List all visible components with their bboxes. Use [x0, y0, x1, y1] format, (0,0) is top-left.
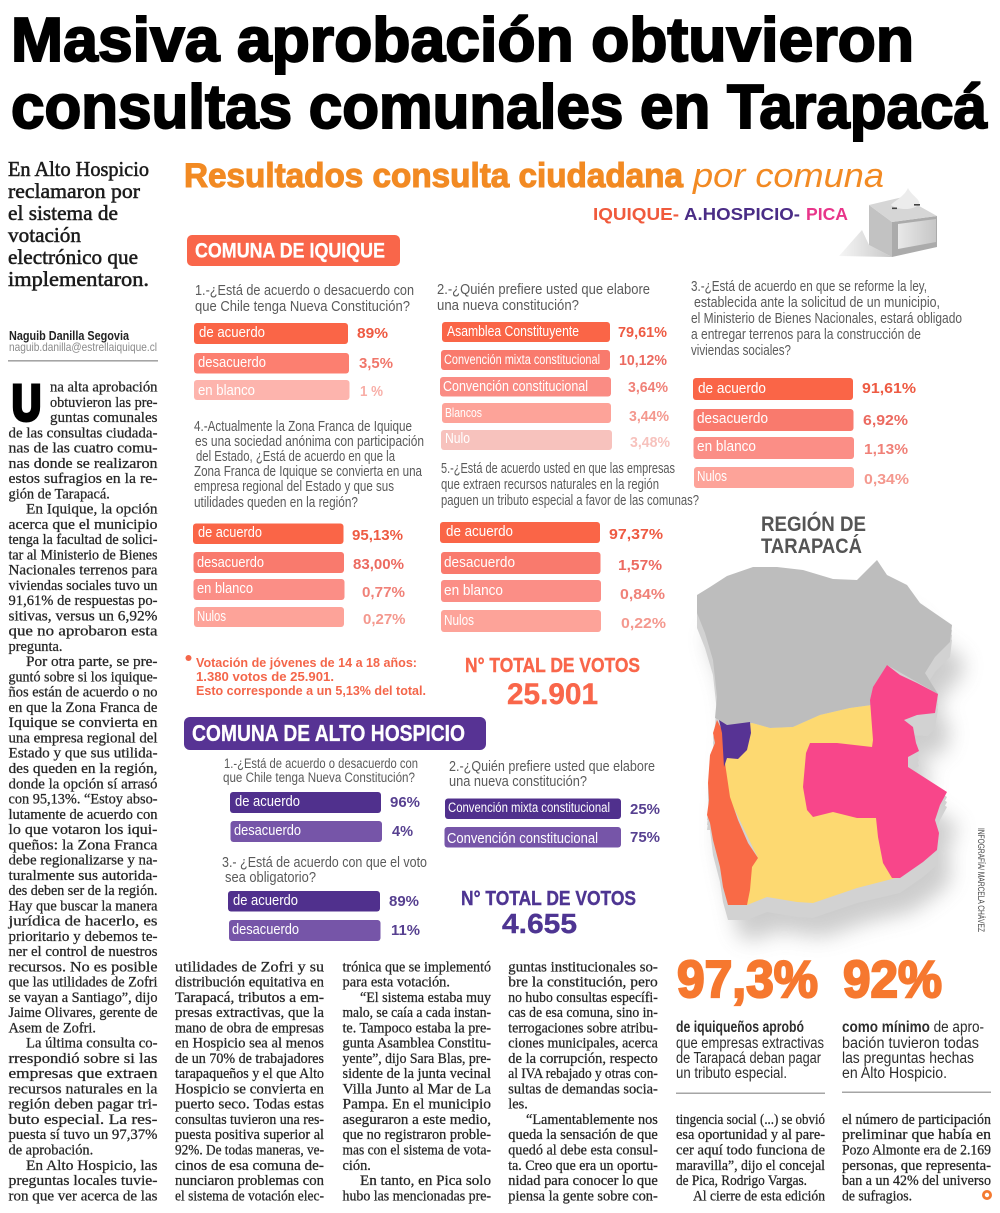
stat: 97,3%: un tributo especial. — [676, 1065, 787, 1082]
body column 3: hubo las mencionadas pre- — [342, 1188, 491, 1204]
chart: Iquique question 3: 0,34% — [864, 471, 909, 488]
body column 6: ban a un 42% del universo — [842, 1173, 991, 1189]
panel: comuna de Iquique heading: COMUNA DE IQUIQUE — [195, 240, 385, 262]
body column 6: personas, que representa- — [842, 1158, 991, 1174]
chart: Iquique question 2: Nulo — [445, 431, 470, 447]
body column 4: queda la sensación de que — [508, 1127, 658, 1143]
chart: Alto Hospicio question 3: desacuerdo — [232, 922, 299, 938]
body column 1: Jaime Olivares, gerente de — [8, 1005, 158, 1021]
chart: Iquique question 1: 3,5% — [359, 355, 393, 372]
body column 4: guntas institucionales so- — [508, 959, 658, 975]
body column 1: tenga la facultad de solici- — [8, 532, 158, 548]
body column 5: cer aquí todo funciona de — [676, 1142, 825, 1158]
total votes Alto Hospicio: 4.655 — [502, 908, 577, 939]
body column 5: de Pica, Rodrigo Vargas. — [676, 1173, 807, 1189]
chart: Iquique question 2: 3,44% — [629, 408, 669, 425]
section heading: por comuna — [692, 157, 884, 195]
total votes Iquique: 25.901 — [507, 678, 598, 711]
map title — [761, 512, 866, 558]
section heading: Resultados consulta ciudadana — [184, 157, 684, 195]
chart: Iquique question 2: 2.-¿Quién prefiere usted que elabore — [437, 282, 650, 298]
body column 1: des queden en la región, — [8, 761, 158, 777]
callout: youth vote — [186, 655, 426, 698]
chart: Alto Hospicio question 2 — [444, 759, 660, 848]
callout: youth vote: Esto corresponde a un 5,13% del total. — [196, 683, 426, 698]
deck text: electrónico que — [8, 245, 138, 269]
chart: Alto Hospicio question 1: que Chile tenga Nueva Constitución? — [223, 770, 415, 785]
chart: Alto Hospicio question 2: Convención constitucional — [447, 831, 598, 847]
body column 4: nidad para conocer lo que — [508, 1173, 658, 1189]
body column 1: jurídica de hacerlo, es — [7, 914, 158, 930]
deck text: reclamaron por — [8, 179, 140, 203]
chart: Alto Hospicio question 2: Convención mixta constitucional — [448, 800, 610, 815]
map: yellow commune — [725, 705, 896, 905]
chart: Alto Hospicio question 1: 1.-¿Está de acuerdo o desacuerdo con — [224, 756, 418, 771]
chart: Alto Hospicio question 3: sea obligatorio? — [225, 870, 316, 886]
chart: Iquique question 3: 3.-¿Está de acuerdo en que se reforme la ley, — [691, 279, 927, 295]
body column 1: puesta sí tuvo un 97,37% — [8, 1127, 158, 1143]
chart: Iquique question 2: 3,48% — [630, 434, 670, 451]
body column 6: Pozo Almonte era de 2.169 — [842, 1142, 991, 1158]
stat: 97,3%: que empresas extractivas — [676, 1035, 824, 1052]
chart: Iquique question 4: 95,13% — [352, 527, 403, 544]
body column 1: ner el control de nuestros — [8, 944, 158, 960]
body column 4: les. — [508, 1097, 528, 1113]
total votes Alto Hospicio: N° TOTAL DE VOTOS — [461, 888, 636, 910]
body column 1: donde la opción sí arrasó — [8, 776, 158, 792]
chart: Iquique question 2: una nueva constitución? — [437, 298, 579, 314]
commune subheading: PICA — [806, 204, 848, 224]
body column 1: región deben pagar tri- — [8, 1097, 158, 1113]
chart: Alto Hospicio question 1: de acuerdo — [235, 794, 300, 810]
chart: Iquique question 5: desacuerdo — [444, 555, 515, 571]
total votes Iquique — [465, 655, 640, 711]
deck text: el sistema de — [8, 201, 118, 225]
chart: Iquique question 1: de acuerdo — [199, 325, 265, 341]
body column 3: ción. — [342, 1158, 371, 1174]
title: Masiva aprobación obtuvieron — [11, 6, 914, 75]
body column 5: Al cierre de esta edición — [693, 1188, 825, 1204]
body column 4: ciones municipales, acerca — [508, 1036, 658, 1052]
chart: Iquique question 1: 1.-¿Está de acuerdo o desacuerdo con — [195, 283, 414, 299]
chart: Iquique question 3: viviendas sociales? — [691, 343, 791, 359]
chart: Iquique question 3: 91,61% — [862, 380, 916, 397]
body column 1: Nacionales terrenos para — [8, 563, 158, 579]
body column 1: queños: la Zona Franca — [8, 837, 158, 853]
deck text — [8, 157, 149, 291]
body column 2: distribución equitativa en — [175, 975, 324, 991]
body column 4: al IVA rebajado y otras con- — [508, 1066, 658, 1082]
body column 3: mas con el sistema de vota- — [342, 1142, 491, 1158]
body column 1: una empresa regional del — [8, 730, 158, 746]
body column 4 — [508, 959, 658, 1204]
chart: Iquique question 3: 1,13% — [864, 441, 908, 458]
body column 4: sultas de demandas socia- — [508, 1082, 658, 1098]
body column 2 — [175, 959, 325, 1204]
body column 1 — [7, 380, 158, 1204]
total votes Alto Hospicio — [461, 888, 636, 939]
stat: 97,3%: de Tarapacá deban pagar — [676, 1050, 821, 1067]
panel: comuna de Alto Hospicio heading: COMUNA DE ALTO HOSPICIO — [192, 720, 465, 746]
chart: Iquique question 2: 79,61% — [618, 324, 667, 341]
chart: Alto Hospicio question 2: 2.-¿Quién prefiere usted que elabore — [449, 759, 655, 775]
body column 2: Tarapacá, tributos a em- — [175, 990, 324, 1006]
body column 1: Asem de Zofri. — [8, 1020, 96, 1036]
body column 1: preguntas locales tuvie- — [8, 1173, 158, 1189]
chart: Alto Hospicio question 1 — [223, 756, 420, 842]
chart: Iquique question 3: Nulos — [697, 469, 727, 485]
body column 1: pregunta. — [8, 639, 62, 655]
chart: Iquique question 2: 3,64% — [628, 379, 668, 396]
body column 1: La última consulta co- — [26, 1036, 158, 1052]
chart: Iquique question 2: Convención mixta constitucional — [444, 352, 600, 367]
commune subheading: IQUIQUE- — [593, 204, 679, 224]
body column 4: piensa la gente sobre con- — [508, 1188, 658, 1204]
callout: youth vote: Votación de jóvenes de 14 a 18 años: — [196, 655, 417, 670]
title: consultas comunales en Tarapacá — [11, 73, 987, 142]
chart: Alto Hospicio question 1: 4% — [392, 823, 413, 840]
stat: 97,3%: de iquiqueños aprobó — [676, 1019, 804, 1036]
icon: ballot box — [839, 188, 937, 257]
chart: Iquique question 5: en blanco — [444, 583, 503, 599]
chart: Iquique question 1: 1 % — [360, 383, 383, 400]
chart: Iquique question 5: 97,37% — [609, 526, 663, 543]
chart: Iquique question 2: Asamblea Constituyente — [447, 324, 579, 340]
body column 2: mano de obra de empresas — [175, 1020, 324, 1036]
body column 1: buto especial. La res- — [8, 1112, 158, 1128]
credit: INFOGRAFÍA/ MARCELA CHÁVEZ — [975, 828, 986, 932]
body column 2: utilidades de Zofri y su — [175, 959, 324, 975]
panel: comuna de Iquique heading — [187, 235, 400, 266]
body column 3: yente”, dijo Sara Blas, pre- — [342, 1051, 491, 1067]
body column 1: rrespondió sobre si las — [8, 1051, 158, 1067]
stat: 92%: bación tuvieron todas — [842, 1035, 979, 1052]
body column 4: “Lamentablemente nos — [526, 1112, 658, 1128]
chart: Iquique question 5: 0,22% — [621, 615, 666, 632]
body column 3: que no registraron proble- — [342, 1127, 491, 1143]
body column 3: Villa Junto al Mar de La — [342, 1082, 492, 1098]
body column 1: nas de las cuatro comu- — [8, 440, 158, 456]
chart: Iquique question 4: 83,00% — [353, 556, 404, 573]
body column 1: sitivas, versus un 6,92% — [8, 608, 158, 624]
body column 1: ron que ver acerca de las — [8, 1188, 158, 1204]
map: Iquique commune — [707, 720, 758, 905]
body column 1: nas donde se realizaron — [8, 456, 158, 472]
chart: Iquique question 3: 6,92% — [863, 412, 908, 429]
chart: Iquique question 5: que extraen recursos naturales en la región — [441, 477, 659, 493]
body column 6: el número de participación — [842, 1112, 991, 1128]
body column 3: malo, se caía a cada instan- — [342, 1005, 491, 1021]
chart: Iquique question 1: 89% — [357, 325, 388, 342]
body column 2: en Hospicio sea al menos — [175, 1036, 324, 1052]
body column 1: En Alto Hospicio, las — [26, 1158, 158, 1174]
body column 4: quedó al debe esta consul- — [508, 1142, 658, 1158]
body column 2: puerto seco. Todas estas — [175, 1097, 324, 1113]
body column 4: bre la constitución, pero — [508, 975, 658, 991]
chart: Iquique question 3: a entregar terrenos para la construcción de — [691, 327, 921, 343]
deck text: implementaron. — [8, 267, 149, 291]
body column 2: presas extractivas, que la — [175, 1005, 325, 1021]
body column 1: debe regionalizarse y na- — [8, 853, 158, 869]
chart: Iquique question 4: 0,27% — [363, 611, 406, 628]
chart: Alto Hospicio question 3: 3.- ¿Está de acuerdo con que el voto — [222, 855, 427, 871]
body column 1: empresas que extraen — [8, 1066, 158, 1082]
chart: Iquique question 2: 10,12% — [619, 352, 667, 369]
commune subheading — [593, 204, 848, 224]
icon: end mark — [982, 1190, 992, 1200]
body column 1: Hay que buscar la manera — [8, 898, 158, 914]
chart: Alto Hospicio question 1: desacuerdo — [234, 823, 301, 839]
chart: Iquique question 3: establecida ante la solicitud de un municipio, — [694, 295, 940, 311]
chart: Alto Hospicio question 3: 11% — [391, 922, 420, 939]
body column 1: Estado y que sus utilida- — [8, 746, 158, 762]
body column 3: gunta Asamblea Constitu- — [342, 1036, 491, 1052]
body column 1: guntó sobre si los iquique- — [8, 669, 158, 685]
chart: Iquique question 5 — [440, 461, 699, 632]
stat: 92% — [842, 951, 991, 1093]
chart: Iquique question 4: Zona Franca de Iquique se convierta en una — [194, 464, 423, 480]
stat: 92%: como mínimo de apro- — [842, 1019, 984, 1036]
stat: 92%: las preguntas hechas — [842, 1050, 974, 1067]
chart: Iquique question 3 — [691, 279, 962, 488]
chart: Iquique question 2: Blancos — [445, 405, 482, 420]
body column 1: turalmente sus autorida- — [8, 868, 158, 884]
body column 1: prioritario y debemos te- — [8, 929, 158, 945]
chart: Iquique question 4: 4.-Actualmente la Zona Franca de Iquique — [194, 419, 412, 435]
body column 1: en que la Zona Franca de — [8, 700, 158, 716]
body column 1: guntas comunales — [50, 410, 158, 426]
body column 4: no hubo consultas específi- — [508, 990, 658, 1006]
chart: Iquique question 4: Nulos — [197, 609, 226, 625]
body column 4: cas de esa comuna, sino in- — [508, 1005, 658, 1021]
body column 2: puesta positiva superior al — [175, 1127, 324, 1143]
body column 1: Iquique se convierta en — [8, 715, 158, 731]
chart: Iquique question 4 — [193, 419, 424, 628]
body column 2: cinos de esa comuna de- — [175, 1158, 324, 1174]
body column 4: ta. Creo que era un oportu- — [508, 1158, 658, 1174]
body column 1: que no aprobaron esta — [8, 624, 158, 640]
commune subheading: A.HOSPICIO- — [684, 204, 800, 224]
chart: Alto Hospicio question 1: 96% — [390, 794, 420, 811]
body column 4: de la corrupción, respecto — [508, 1051, 658, 1067]
body column 1: se vayan a Santiago”, dijo — [8, 990, 158, 1006]
chart: Alto Hospicio question 3 — [222, 855, 427, 941]
chart: Iquique question 5: 1,57% — [618, 557, 662, 574]
body column 2: 92%. De todas maneras, ve- — [175, 1142, 324, 1158]
chart: Iquique question 1: en blanco — [198, 383, 255, 399]
body column 1: Por otra parte, se pre- — [26, 654, 158, 670]
chart: Iquique question 4: utilidades queden en la región? — [194, 495, 358, 511]
body column 2: consultas tuvieron una res- — [175, 1112, 324, 1128]
chart: Iquique question 1 — [194, 283, 414, 400]
body column 3: sidente de la junta vecinal — [342, 1066, 491, 1082]
body column 5: maravilla”, dijo el concejal — [676, 1158, 825, 1174]
body column 1: recursos. No es posible — [8, 959, 158, 975]
chart: Alto Hospicio question 2: 75% — [630, 829, 660, 846]
body column 1: lo que votaron los iqui- — [8, 822, 158, 838]
body column 5 — [676, 1112, 825, 1204]
chart: Iquique question 4: del Estado, ¿Está de acuerdo en que la — [196, 449, 396, 465]
body column 1: que las utilidades de Zofri — [8, 975, 158, 991]
map: Tarapacá region — [697, 560, 964, 939]
body column 1: En Iquique, la opción — [26, 502, 158, 518]
chart: Iquique question 5: paguen un tributo especial a favor de las comunas? — [441, 493, 699, 509]
body column 1: de aprobación. — [8, 1142, 93, 1158]
body column 3: para esta votación. — [342, 975, 450, 991]
body column 2: nunciaron problemas con — [175, 1173, 324, 1189]
body column 1: lutamente de acuerdo con — [8, 807, 158, 823]
body column 6: de sufragios. — [842, 1188, 912, 1204]
chart: Iquique question 4: es una sociedad anónima con participación — [195, 434, 424, 450]
stat: 92%: 92% — [843, 951, 942, 1009]
body column 1: ños están de acuerdo o no — [8, 685, 158, 701]
body column 1: con 95,13%. “Estoy abso- — [8, 792, 158, 808]
chart: Iquique question 5: Nulos — [444, 613, 474, 629]
byline: Naguib Danilla Segovia — [9, 329, 130, 343]
body column 1: viviendas sociales tuvo un — [8, 578, 158, 594]
chart: Iquique question 1: desacuerdo — [198, 355, 266, 371]
body column 2: el sistema de votación elec- — [175, 1188, 324, 1204]
body column 1: tar al Ministerio de Bienes — [8, 547, 158, 563]
body column 1: recursos naturales en la — [8, 1082, 158, 1098]
body column 6 — [842, 1112, 991, 1204]
body column 1: na alta aprobación — [50, 380, 158, 396]
chart: Alto Hospicio question 2: 25% — [630, 801, 660, 818]
chart: Iquique question 3: en blanco — [697, 439, 756, 455]
chart: Alto Hospicio question 3: 89% — [389, 893, 419, 910]
body column 1: 91,61% de respuestas po- — [8, 593, 158, 609]
chart: Alto Hospicio question 2: una nueva constitución? — [449, 774, 587, 790]
byline: naguib.danilla@estrellaiquique.cl — [9, 340, 157, 354]
chart: Iquique question 5: 5.-¿Está de acuerdo usted en que las empresas — [441, 461, 675, 477]
body column 1: gión de Tarapacá. — [8, 486, 110, 502]
drop cap: U — [12, 375, 41, 431]
body column 2: tarapaqueños y el que Alto — [175, 1066, 324, 1082]
chart: Iquique question 2 — [437, 282, 670, 451]
byline — [8, 329, 158, 362]
body column 3: “El sistema estaba muy — [360, 990, 492, 1006]
chart: Iquique question 4: de acuerdo — [198, 525, 262, 541]
deck text: En Alto Hospicio — [8, 157, 149, 181]
body column 3: Pampa. En el municipio — [342, 1097, 491, 1113]
body column 3: te. Tampoco estaba la pre- — [342, 1020, 491, 1036]
body column 1: estos sufragios en la re- — [8, 471, 158, 487]
stat: 97,3%: 97,3% — [677, 951, 818, 1009]
chart: Iquique question 2: Convención constitucional — [443, 379, 588, 395]
chart: Iquique question 3: de acuerdo — [698, 381, 766, 397]
chart: Iquique question 5: 0,84% — [620, 586, 665, 603]
map: Alto Hospicio commune — [719, 720, 751, 767]
deck text: votación — [8, 223, 81, 247]
body column 3 — [342, 959, 492, 1204]
callout: youth vote: 1.380 votos de 25.901. — [196, 669, 334, 684]
map title: TARAPACÁ — [761, 535, 862, 558]
body column 1: acerca que el municipio — [8, 517, 158, 533]
chart: Alto Hospicio question 3: de acuerdo — [233, 893, 298, 909]
chart: Iquique question 1: que Chile tenga Nueva Constitución? — [195, 299, 410, 315]
chart: Iquique question 4: empresa regional del Estado y que sus — [194, 479, 394, 495]
body column 3: trónica que se implementó — [342, 959, 491, 975]
chart: Iquique question 4: 0,77% — [362, 584, 405, 601]
map: pink commune — [803, 665, 947, 878]
body column 2: de un 70% de trabajadores — [175, 1051, 324, 1067]
body column 5: tingencia social (...) se obvió — [676, 1112, 825, 1128]
chart: Iquique question 5: de acuerdo — [446, 524, 513, 540]
map: northern communes — [697, 560, 952, 728]
total votes Iquique: N° TOTAL DE VOTOS — [465, 655, 640, 677]
body column 1: de las consultas ciudada- — [8, 425, 158, 441]
chart: Iquique question 4: desacuerdo — [197, 555, 264, 571]
title — [11, 6, 987, 142]
body column 5: esa oportunidad y al pare- — [676, 1127, 825, 1143]
body column 1: des deben ser de la región. — [8, 883, 158, 899]
chart: Iquique question 3: desacuerdo — [697, 411, 768, 427]
body column 2: Hospicio se convierta en — [175, 1082, 324, 1098]
body column 3: aseguraron a este medio, — [342, 1112, 491, 1128]
body column 1: obtuvieron las pre- — [50, 395, 158, 411]
stat: 97,3% — [676, 951, 825, 1094]
map title: REGIÓN DE — [761, 512, 866, 536]
body column 3: En tanto, en Pica solo — [360, 1173, 491, 1189]
chart: Iquique question 4: en blanco — [197, 581, 253, 597]
body column 4: terrogaciones sobre atribu- — [508, 1020, 658, 1036]
body column 6: preliminar que había en — [842, 1127, 991, 1143]
stat: 92%: en Alto Hospicio. — [842, 1065, 947, 1082]
